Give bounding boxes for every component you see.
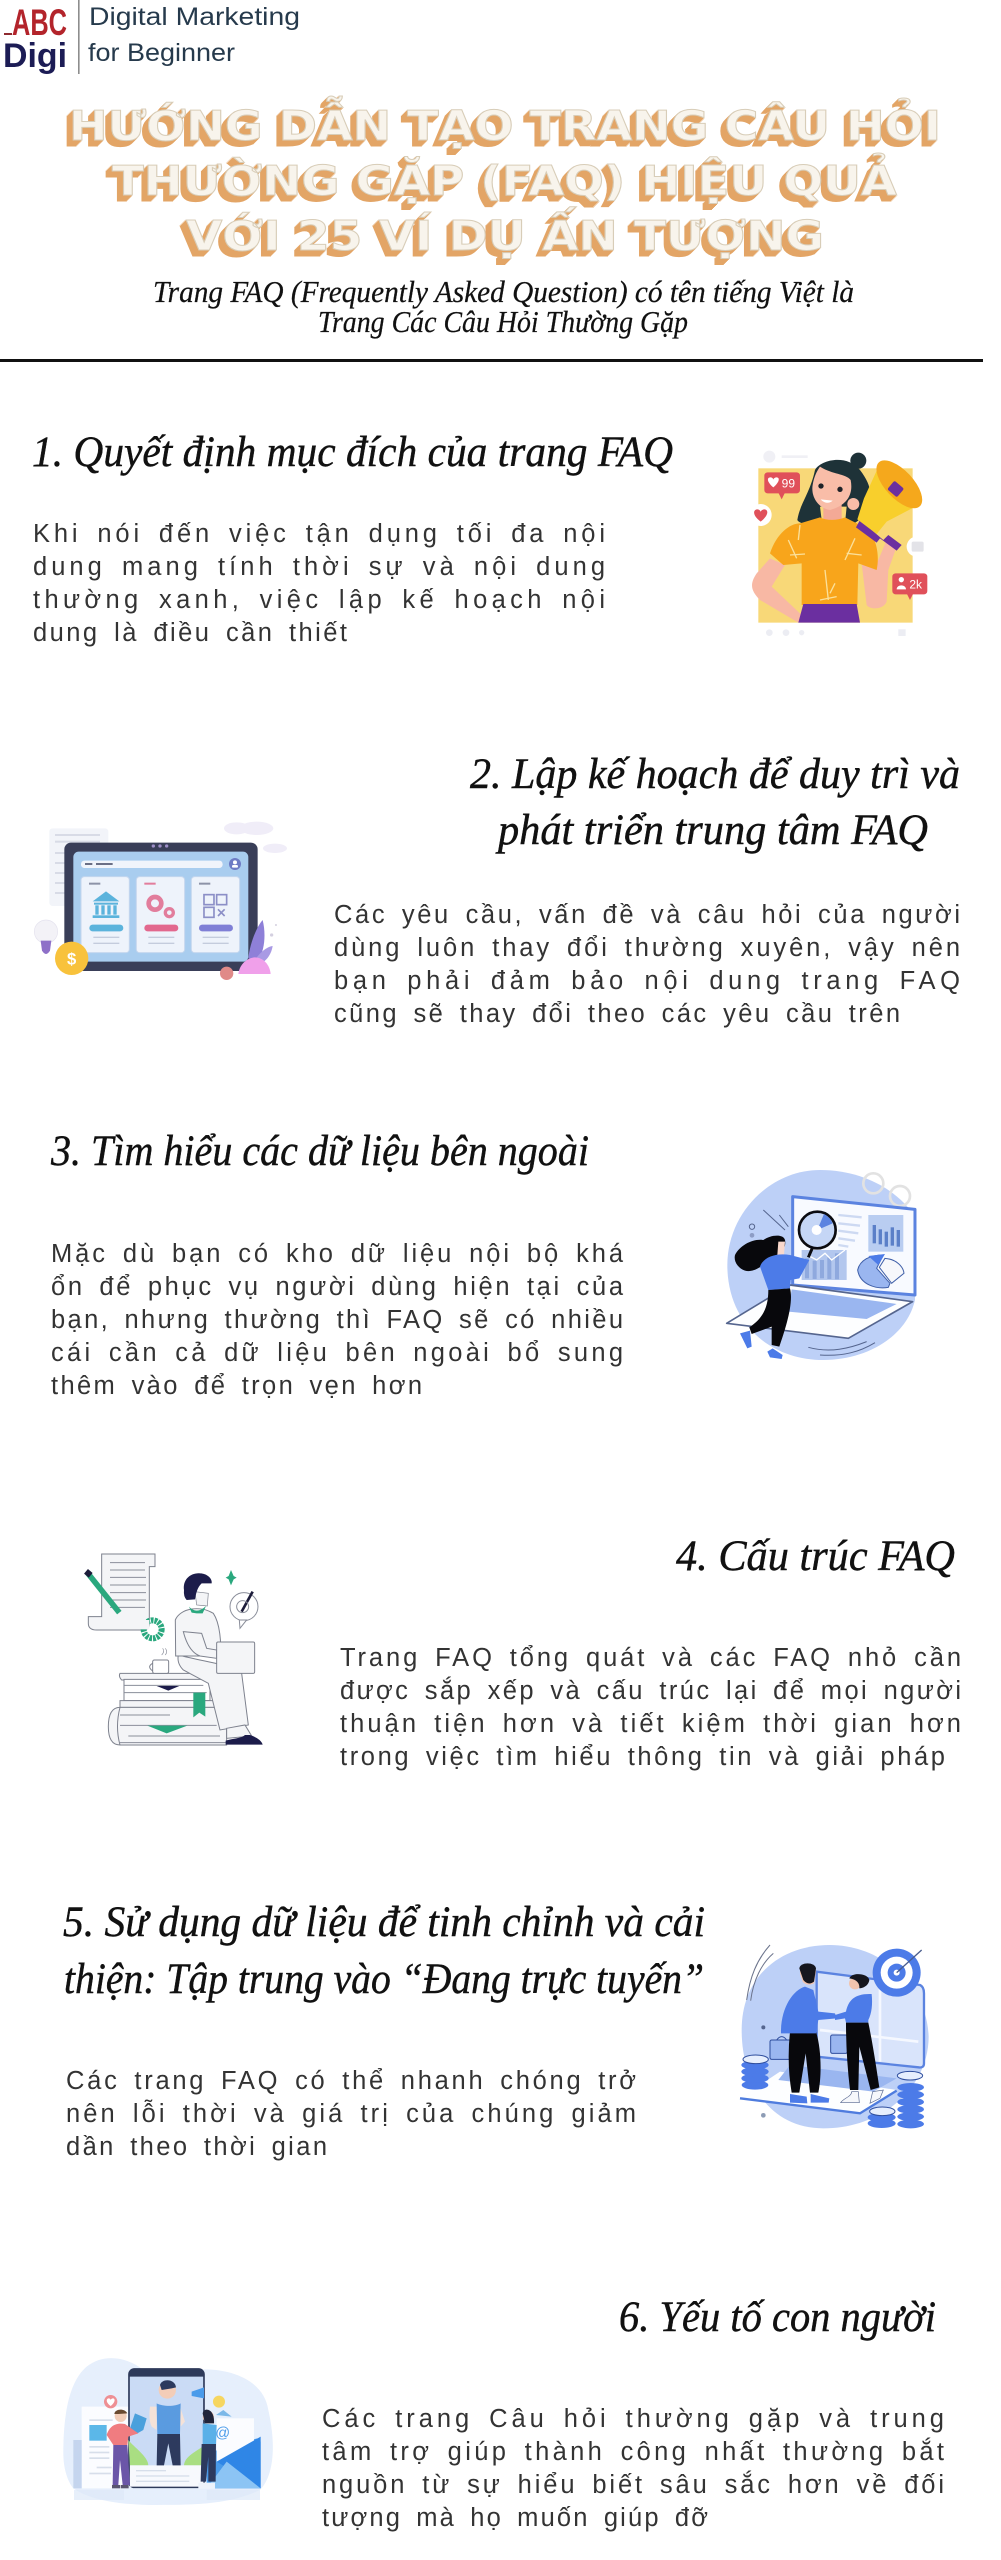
heading 1: 1. Quyết định mục đích của trang FAQ: [32, 429, 673, 476]
panel: section 6: [63, 2294, 944, 2532]
body text 3: cái cần cả dữ liệu bên ngoài bổ sung: [51, 1339, 623, 1367]
heading 5: thiện: Tập trung vào “Đang trực tuyến”: [64, 1956, 704, 2003]
icon: tablet with cards: $: [67, 949, 77, 968]
heading 5: [63, 1899, 705, 2003]
body text 3: [51, 1240, 624, 1400]
logo mark: ABC: [12, 2, 67, 43]
subtitle: Trang Các Câu Hỏi Thường Gặp: [318, 304, 688, 339]
title: [69, 96, 941, 260]
title: VỚI 25 VÍ DỤ ẤN TƯỢNG: [186, 206, 824, 260]
panel: section 5: [63, 1899, 929, 2161]
body text 3: Mặc dù bạn có kho dữ liệu nội bộ khá: [51, 1240, 624, 1268]
icon: tablet with cards: [34, 822, 287, 980]
subtitle: Trang FAQ (Frequently Asked Question) có tên tiếng Việt là: [153, 274, 854, 309]
body text 1: thường xanh, việc lập kế hoạch nội: [33, 586, 605, 614]
icon: team with phone: @: [215, 2425, 230, 2441]
panel: section 2: [34, 751, 960, 1028]
body text 3: thêm vào để trọn vẹn hơn: [51, 1372, 422, 1400]
body text 1: Khi nói đến việc tận dụng tối đa nội: [33, 520, 605, 548]
body text 3: ổn để phục vụ người dùng hiện tại của: [51, 1273, 624, 1301]
body text 6: tượng mà họ muốn giúp đỡ: [322, 2504, 708, 2532]
icon: person working on books: [86, 1554, 263, 1745]
body text 2: [334, 901, 960, 1028]
body text 2: cũng sẽ thay đổi theo các yêu cầu trên: [334, 1000, 900, 1028]
heading 2: 2. Lập kế hoạch để duy trì và: [470, 751, 960, 798]
heading 6: 6. Yếu tố con người: [619, 2294, 936, 2341]
heading 3: 3. Tìm hiểu các dữ liệu bên ngoài: [50, 1128, 589, 1175]
logo mark: Digi: [3, 37, 67, 75]
icon: woman with megaphone: [750, 451, 930, 636]
logo tagline: [88, 3, 300, 67]
panel: section 1: [32, 429, 930, 647]
body text 2: Các yêu cầu, vấn đề và câu hỏi của người: [334, 901, 960, 929]
heading 5: 5. Sử dụng dữ liệu để tinh chỉnh và cải: [63, 1899, 705, 1946]
body text 1: dung là điều cần thiết: [33, 619, 347, 647]
body text 2: dùng luôn thay đổi thường xuyên, vậy nên: [334, 934, 960, 962]
icon: woman with megaphone: 2k: [909, 578, 923, 592]
body text 3: bạn, nhưng thường thì FAQ sẽ có nhiều: [51, 1306, 623, 1334]
icon: woman with megaphone: 99: [782, 476, 795, 490]
body text 6: [322, 2405, 944, 2532]
heading 2: phát triển trung tâm FAQ: [495, 807, 928, 854]
body text 1: dung mang tính thời sự và nội dung: [33, 553, 605, 581]
logo: ABC Digi: [3, 0, 300, 75]
panel: section 4: [86, 1533, 961, 1771]
body text 4: được sắp xếp và cấu trúc lại để mọi người: [340, 1676, 961, 1705]
body text 4: [340, 1644, 961, 1771]
body text 4: Trang FAQ tổng quát và các FAQ nhỏ cần: [340, 1644, 961, 1672]
body text 4: thuận tiện hơn và tiết kiệm thời gian hơn: [340, 1710, 961, 1738]
heading 4: 4. Cấu trúc FAQ: [676, 1533, 955, 1580]
body text 6: Các trang Câu hỏi thường gặp và trung: [322, 2405, 944, 2433]
body text 6: tâm trợ giúp thành công nhất thường bắt: [322, 2437, 944, 2466]
subtitle: [153, 274, 854, 339]
body text 5: dần theo thời gian: [66, 2133, 327, 2161]
icon: woman analysing data on laptop: [727, 1170, 915, 1360]
body text 5: nên lỗi thời và giá trị của chúng giảm: [66, 2099, 636, 2128]
body text 4: trong việc tìm hiểu thông tin và giải pháp: [340, 1743, 945, 1771]
logo tagline: Digital Marketing: [89, 3, 300, 31]
title: THƯỜNG GẶP (FAQ) HIỆU QUẢ: [112, 152, 897, 205]
icon: business handshake with target: [740, 1945, 929, 2128]
panel: section 3: [50, 1128, 915, 1400]
heading 2: [470, 751, 960, 854]
header divider line: [0, 359, 983, 362]
logo tagline: for Beginner: [88, 39, 235, 67]
title: HƯỚNG DẪN TẠO TRANG CÂU HỎI: [69, 96, 941, 150]
body text 2: bạn phải đảm bảo nội dung trang FAQ: [334, 967, 960, 995]
body text 6: nguồn từ sự hiểu biết sâu sắc hơn về đối: [322, 2470, 944, 2499]
logo mark: [3, 2, 67, 75]
body text 5: [66, 2067, 636, 2161]
body text 1: [33, 520, 605, 647]
body text 5: Các trang FAQ có thể nhanh chóng trở: [66, 2067, 636, 2095]
icon: team with phone: [63, 2358, 273, 2505]
